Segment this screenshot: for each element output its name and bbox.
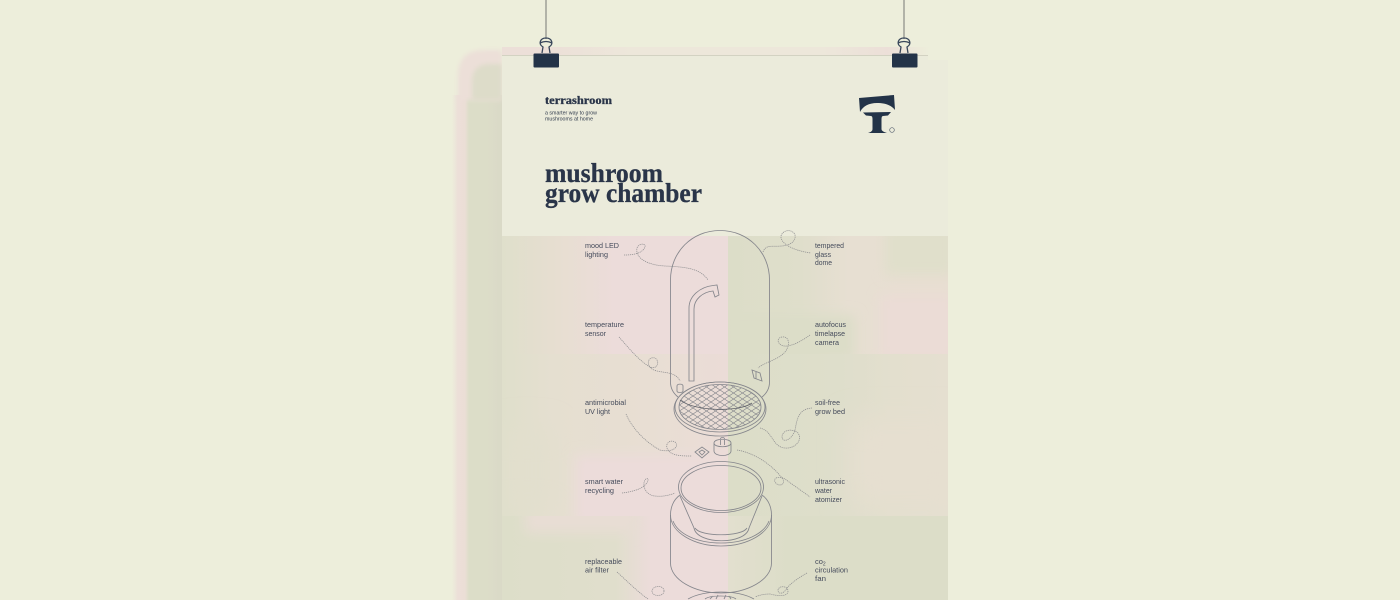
callout labels left: temperature — [585, 320, 624, 329]
callout labels left: UV light — [585, 407, 611, 416]
callout labels left: sensor — [585, 329, 606, 338]
ultrasonic atomizer — [714, 438, 731, 456]
callout labels right: tempered — [815, 241, 844, 250]
callout labels left: recycling — [585, 486, 614, 495]
callout labels right: co — [815, 557, 823, 566]
callout labels right: circulation — [815, 566, 848, 574]
poster top edge — [502, 54, 928, 56]
callout labels right: 2 — [823, 562, 826, 568]
hanging clip right — [892, 0, 918, 68]
callout labels right: fan — [815, 574, 826, 583]
poster header panel — [502, 56, 948, 236]
callout labels right: camera — [815, 338, 840, 347]
poster drop shadow — [452, 47, 930, 600]
callout labels left: smart water — [585, 477, 623, 486]
callout labels right: atomizer — [815, 495, 842, 504]
UV light — [695, 447, 709, 458]
callout labels left: antimicrobial — [585, 398, 626, 407]
logo: mushroom T — [859, 95, 895, 133]
callout labels left: lighting — [585, 250, 608, 259]
leader lines — [617, 231, 812, 599]
callout labels right: soil-free — [815, 398, 840, 407]
poster lower panel with colour blocks — [502, 225, 960, 600]
circulation fan — [688, 592, 754, 599]
callout labels left — [585, 241, 626, 574]
title — [545, 158, 702, 208]
brand block: mushrooms at home — [545, 116, 593, 122]
title: mushroom — [545, 158, 663, 188]
grow bed — [674, 382, 766, 436]
brand block — [545, 95, 612, 122]
callout labels right: timelapse — [815, 329, 845, 338]
brand block: terrashroom — [545, 95, 612, 107]
callout labels right: autofocus — [815, 320, 846, 329]
callout labels right: glass — [815, 250, 831, 259]
LED lighting tube — [689, 285, 719, 381]
callout labels left: air filter — [585, 566, 609, 574]
callout labels right: dome — [815, 258, 832, 267]
title: grow chamber — [545, 178, 702, 208]
exploded diagram — [670, 230, 772, 599]
temperature sensor — [677, 384, 683, 392]
hanging clip left — [534, 0, 559, 68]
callout labels right: water — [814, 486, 832, 495]
callout labels right: grow bed — [815, 407, 845, 416]
water bowl — [678, 462, 764, 541]
callout labels right — [814, 241, 848, 583]
base cylinder — [670, 495, 772, 593]
brand block: a smarter way to grow — [545, 110, 597, 116]
camera — [752, 370, 762, 381]
glass dome — [670, 230, 770, 397]
callout labels right: ultrasonic — [815, 477, 845, 486]
callout labels left: replaceable — [585, 557, 622, 566]
callout labels left: mood LED — [585, 241, 620, 250]
